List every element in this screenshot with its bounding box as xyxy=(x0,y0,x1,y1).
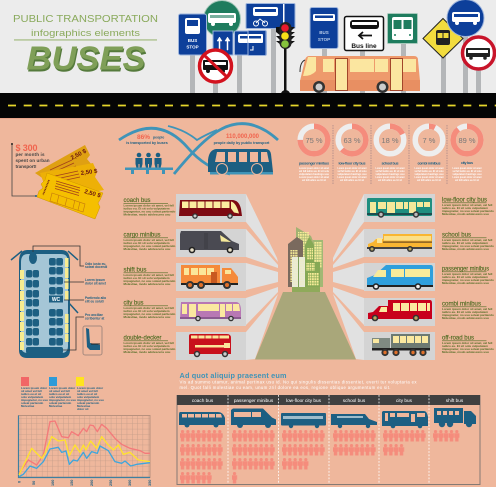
ticket cost text xyxy=(11,143,50,197)
floor plan callouts: elit eu soluti xyxy=(85,300,104,304)
chart legend: soleat partiendo xyxy=(77,401,100,405)
sign: small bus left xyxy=(248,30,266,56)
light rays xyxy=(246,194,364,360)
chart legend: sit amet vel fell xyxy=(21,389,42,393)
stat: 110,000,000: 110,000,000 xyxy=(226,134,260,140)
text block: coach bus: Molestiae, modo adolescens usu xyxy=(124,212,171,216)
text block: low-floor city bus: iudico eu. Et sit solu vulputatem xyxy=(442,206,488,210)
text block: passenger minibus: passenger minibus xyxy=(442,266,489,272)
line chart: 200 xyxy=(90,480,94,486)
sign: bus line xyxy=(344,16,384,50)
text block: school bus: Lorem ipsum dolor sit amet, vel fell xyxy=(442,238,493,242)
stat: 86% xyxy=(126,134,168,145)
text block: double-decker xyxy=(124,334,176,354)
chart legend: soleat partiendo xyxy=(21,401,44,405)
line chart xyxy=(18,416,152,486)
sign: red circle xyxy=(462,37,494,69)
stat: 86%: people xyxy=(153,136,164,140)
chart legend: sit amet vel fell xyxy=(77,389,98,393)
line chart: 300 xyxy=(128,480,132,486)
ticket cost text: transport! xyxy=(16,164,37,169)
icon: bus seat xyxy=(83,326,102,355)
traffic light xyxy=(276,22,295,94)
stat: 110,000,000: people daily by public transport xyxy=(214,141,270,145)
text block: combi minibus: combi minibus xyxy=(442,300,481,308)
donut descriptions: Lorem ipsum dolor sit amet xyxy=(376,175,405,179)
text block: coach bus: coach bus xyxy=(124,197,150,204)
people counts xyxy=(180,430,460,484)
donut descriptions: vel fell iudico eu. Et sit solu xyxy=(452,169,482,173)
peach background xyxy=(0,118,496,487)
text block: cargo minibus: cargo minibus xyxy=(124,232,160,238)
vehicle panels xyxy=(176,194,435,360)
sign: green circle bus xyxy=(204,0,240,38)
title: PUBLIC TRANSPORTATION xyxy=(13,13,158,25)
text block: city bus: iudico eu. Et sit solu vulputatem xyxy=(124,309,170,313)
text block: coach bus: iudico eu. Et sit solu vulputatem xyxy=(124,206,170,210)
donut 63%: 63 % xyxy=(343,136,361,145)
sign: bus stop right xyxy=(310,8,338,48)
chart legend: solu vulputatem xyxy=(49,395,72,399)
bus: coach xyxy=(179,200,242,219)
sign: bus line: Bus line xyxy=(351,43,377,50)
chart legend: Lorem ipsum dolor xyxy=(21,386,48,390)
text block: double-decker: double-decker xyxy=(124,334,162,342)
chart legend: iudico eu et sit xyxy=(21,392,41,396)
floor plan callouts: Odio iusto eu, xyxy=(85,262,106,266)
icon: bus front-side xyxy=(208,149,273,174)
sign: no buses xyxy=(200,50,232,82)
tickets xyxy=(35,145,104,219)
text block: low-floor city bus: impugnetur, no usu soleat partiendo xyxy=(442,209,494,213)
table header: school bus xyxy=(343,398,366,403)
donut captions xyxy=(299,161,473,166)
table silhouette: city bus xyxy=(382,411,428,428)
city buildings xyxy=(288,227,323,292)
line chart: 250 xyxy=(109,480,113,486)
chart legend: Molestiae xyxy=(49,404,63,408)
bus: low-floor city bus xyxy=(367,198,432,218)
table silhouette: passenger minibus xyxy=(231,408,276,428)
donut descriptions: Lorem ipsum dolor sit amet xyxy=(452,166,482,170)
text block: low-floor city bus xyxy=(442,196,494,216)
donut descriptions: vel fell iudico eu. Et sit solu xyxy=(414,169,444,173)
main bus xyxy=(300,56,420,93)
sign: bus stop left: BUS xyxy=(188,38,197,43)
bus: cargo minibus xyxy=(180,231,239,253)
bus: combi minibus xyxy=(368,300,432,321)
table heading: Ad quot aliquip praesent eum xyxy=(180,371,287,380)
table silhouette: school bus xyxy=(331,414,377,428)
chart legend: solu vulputatem xyxy=(21,395,44,399)
bus: double-decker xyxy=(189,334,231,357)
table intro text: Vis ad summo utamur, animal pertinax usu id. No qui singulis dissentias dissentiet, everti tur voluptaria ex xyxy=(180,380,417,384)
chart legend: impugnetur, no usu xyxy=(49,398,76,402)
sign: arrows xyxy=(213,31,233,55)
text block: school bus: iudico eu. Et sit solu vulputatem xyxy=(442,241,488,245)
text block: shift bus: shift bus xyxy=(124,266,146,274)
donut captions: school bus xyxy=(382,162,398,166)
chart legend: sit amet vel fell xyxy=(49,389,70,393)
line chart: 150 xyxy=(70,480,74,486)
title: infographics elements xyxy=(31,28,140,39)
text block: cargo minibus: Lorem ipsum dolor sit amet, vel fell xyxy=(124,238,174,242)
donut descriptions: vulputatem hastings usu xyxy=(299,172,329,176)
line chart: 350 xyxy=(148,480,152,486)
donut descriptions: vulputatem hastings usu xyxy=(376,172,405,176)
donut 7%: 7 % xyxy=(423,136,436,145)
donut descriptions: Lorem ipsum dolor sit amet xyxy=(299,166,329,170)
sign: yellow diamond xyxy=(423,18,463,58)
table: bus capacity xyxy=(177,395,480,484)
text block: double-decker: iudico eu. Et sit solu vulputatem xyxy=(124,344,170,348)
chart legend xyxy=(21,377,104,411)
donut 63% xyxy=(338,126,366,154)
text block: off-road bus xyxy=(442,334,494,354)
floor plan callouts xyxy=(33,246,107,350)
text block: school bus: impugnetur, no usu soleat partiendo xyxy=(442,244,494,248)
text block: city bus: city bus xyxy=(124,300,144,306)
donut descriptions: vel fell iudico eu. Et sit solu xyxy=(299,169,329,173)
table header: shift bus xyxy=(446,398,464,403)
title: BUSES xyxy=(26,40,146,76)
text block: combi minibus xyxy=(442,300,494,320)
text block: coach bus: Lorem ipsum dolor sit amet, vel fell xyxy=(124,204,174,208)
donut descriptions: vel fell iudico eu. Et sit xyxy=(417,178,441,182)
text block: combi minibus: Molestiae, modo adolescens usu xyxy=(442,316,489,320)
text block: shift bus xyxy=(124,266,176,286)
table intro text xyxy=(180,380,417,390)
donut descriptions: vel fell iudico eu. Et sit solu xyxy=(376,169,405,173)
table header: coach bus xyxy=(192,398,214,403)
donut 18% xyxy=(376,126,404,154)
front ticket: 2,50 $ xyxy=(83,189,102,200)
text block: passenger minibus: Molestiae, modo adolescens usu xyxy=(442,281,489,285)
text block: cargo minibus: iudico eu. Et sit solu vulputatem xyxy=(124,241,170,245)
icon: seated people on bench xyxy=(125,153,173,174)
text block: passenger minibus: Lorem ipsum dolor sit amet, vel fell xyxy=(442,272,493,276)
text block: cargo minibus xyxy=(124,232,176,251)
chart legend: impugnetur, no usu xyxy=(77,398,104,402)
road xyxy=(0,93,496,118)
chart legend: Lorem ipsum dolor xyxy=(49,386,76,390)
table silhouette: shift bus xyxy=(434,408,476,427)
text block: off-road bus: off-road bus xyxy=(442,334,474,342)
text block: off-road bus: iudico eu. Et sit solu vulputatem xyxy=(442,344,488,348)
stat: 86%: is transported by buses xyxy=(126,141,168,145)
floor plan callouts: Pro ancillae xyxy=(85,313,103,317)
text block: double-decker: Lorem ipsum dolor sit amet, vel fell xyxy=(124,341,174,345)
road to city xyxy=(255,292,356,360)
donut dividers xyxy=(333,125,447,184)
donut descriptions xyxy=(299,166,482,182)
sign: green bus front xyxy=(388,14,418,44)
donut descriptions: Lorem ipsum dolor sit amet xyxy=(299,175,329,179)
text block: off-road bus: impugnetur, no usu soleat partiendo xyxy=(442,347,494,351)
donut descriptions: vel fell iudico eu. Et sit xyxy=(340,178,364,182)
chart legend: Molestiae xyxy=(21,404,35,408)
text block: shift bus: Lorem ipsum dolor sit amet, vel fell xyxy=(124,273,174,277)
road-side strip xyxy=(0,118,496,119)
text block: cargo minibus: Molestiae, modo adolescens usu xyxy=(124,247,171,251)
text block: school bus: school bus xyxy=(442,232,471,238)
donut 18%: 18 % xyxy=(381,136,399,145)
bus floor plan xyxy=(11,250,78,358)
sign poles xyxy=(190,28,481,94)
floor plan callouts: soleat docendi xyxy=(85,265,107,269)
title xyxy=(13,13,158,78)
text block: school bus: Molestiae, modo adolescens usu xyxy=(442,247,489,251)
table silhouette: coach xyxy=(179,412,225,428)
floor plan callouts: Partiendo alia xyxy=(85,296,106,300)
arcs: transport statistic xyxy=(119,124,278,174)
text block: coach bus: impugnetur, no usu soleat partiendo xyxy=(124,210,176,214)
floor plan callouts: dolor sit amet xyxy=(85,282,107,286)
bus: shift bus xyxy=(181,265,238,289)
table header: passenger minibus xyxy=(234,398,274,403)
donut descriptions: vel fell iudico eu. Et sit solu xyxy=(338,169,367,173)
table intro text: mel. Quot falli molestiae cu eam, unum zril dolore ea eos, regione oblique argumentum ex sit. xyxy=(180,385,390,390)
line chart: 50 xyxy=(32,481,36,485)
sign: bus stop left xyxy=(178,14,206,55)
chart legend: iudico eu et sit xyxy=(77,392,97,396)
text block: combi minibus: impugnetur, no usu soleat partiendo xyxy=(442,313,494,317)
text block: passenger minibus: iudico eu. Et sit solu vulputatem xyxy=(442,275,488,279)
text block: city bus xyxy=(124,300,176,319)
text block: low-floor city bus: Molestiae, modo adolescens usu xyxy=(442,212,489,216)
text block: off-road bus: Lorem ipsum dolor sit amet, vel fell xyxy=(442,341,493,345)
sign: bus stop right: BUS xyxy=(319,30,329,35)
text block: city bus: impugnetur, no usu soleat partiendo xyxy=(124,312,176,316)
chart legend: impugnetur, no usu xyxy=(21,398,48,402)
donut descriptions: Lorem ipsum dolor sit amet xyxy=(338,175,367,179)
sign: bus stop right: STOP xyxy=(318,37,330,42)
text block: passenger minibus xyxy=(442,266,494,285)
donut captions: city bus xyxy=(461,161,473,165)
table header: city bus xyxy=(396,398,413,403)
stat: 86%: 86% xyxy=(137,134,150,141)
text block: city bus: Molestiae, modo adolescens usu xyxy=(124,315,171,319)
donut captions: combi minibus xyxy=(418,162,440,166)
text block: double-decker: impugnetur, no usu soleat partiendo xyxy=(124,347,176,351)
bus: city bus xyxy=(180,302,241,321)
table silhouette: low-floor city bus xyxy=(281,413,326,428)
sign: bus and bicycle xyxy=(246,4,295,28)
line chart: 100 xyxy=(51,480,55,486)
chart legend: Molestiae xyxy=(77,404,91,408)
title: BUSES xyxy=(28,42,146,78)
donut 89% xyxy=(453,126,481,154)
text block: off-road bus: Molestiae, modo adolescens usu xyxy=(442,350,489,354)
donut captions: low-floor city bus xyxy=(338,162,366,166)
donut 7% xyxy=(415,126,443,154)
bus floor plan: WC xyxy=(52,297,61,303)
donut descriptions: vulputatem hastings usu xyxy=(414,172,444,176)
middle ticket: 2,50 $ xyxy=(80,169,98,177)
chart legend: solu vulputatem xyxy=(77,395,100,399)
donut descriptions: Lorem ipsum dolor sit amet xyxy=(452,175,482,179)
donut descriptions: vel fell iudico eu. Et sit xyxy=(302,178,326,182)
text block: low-floor city bus: low-floor city bus xyxy=(442,196,487,204)
sign: blue circle xyxy=(447,0,484,36)
text block: passenger minibus: impugnetur, no usu soleat partiendo xyxy=(442,278,494,282)
stat: 110,000,000 xyxy=(214,134,270,145)
donut descriptions: Lorem ipsum dolor sit amet xyxy=(414,175,444,179)
table header xyxy=(177,395,480,405)
text block: city bus: Lorem ipsum dolor sit amet, vel fell xyxy=(124,306,174,310)
chart legend: soleat partiendo xyxy=(49,401,72,405)
sign: bus stop left: STOP xyxy=(186,44,199,50)
donut 75% xyxy=(300,126,328,154)
bus: off-road bus xyxy=(372,334,430,356)
chart legend: dolor sit xyxy=(77,407,88,411)
ticket cost text: per month is xyxy=(16,152,45,157)
text block: combi minibus: Lorem ipsum dolor sit amet, vel fell xyxy=(442,307,493,311)
bus: school bus xyxy=(367,234,432,252)
chart legend: Lorem ipsum dolor xyxy=(77,386,104,390)
text block: shift bus: iudico eu. Et sit solu vulputatem xyxy=(124,276,170,280)
sky background xyxy=(0,0,496,94)
donut 89%: 89 % xyxy=(458,136,476,145)
bus: passenger minibus xyxy=(367,265,433,290)
donut descriptions: vel fell iudico eu. Et sit xyxy=(378,178,402,182)
text block: shift bus: Molestiae, modo adolescens usu xyxy=(124,282,171,286)
back ticket: 2,50 $ xyxy=(70,148,88,162)
donut descriptions: vulputatem hastings usu xyxy=(338,172,367,176)
ticket cost text: spent on urban xyxy=(16,158,50,163)
donut descriptions: vulputatem hastings usu xyxy=(452,172,482,176)
line chart: 0 xyxy=(18,481,22,483)
chart legend: iudico eu et sit xyxy=(49,392,69,396)
floor plan callouts: scribentur at xyxy=(85,316,105,320)
donut descriptions: Lorem ipsum dolor sit amet xyxy=(338,166,367,170)
donut descriptions: Lorem ipsum dolor sit amet xyxy=(414,166,444,170)
sign: lane bus xyxy=(234,31,266,55)
donut charts xyxy=(300,126,481,154)
text block: cargo minibus: impugnetur, no usu soleat partiendo xyxy=(124,244,176,248)
table header: low-floor city bus xyxy=(286,398,322,403)
donut 75%: 75 % xyxy=(305,136,323,145)
text block: combi minibus: iudico eu. Et sit solu vulputatem xyxy=(442,310,488,314)
donut captions: passenger minibus xyxy=(299,162,329,166)
text block: school bus xyxy=(442,232,494,251)
text block: double-decker: Molestiae, modo adolescens usu xyxy=(124,350,171,354)
ticket cost text: $ 300 xyxy=(16,143,38,153)
text block: shift bus: impugnetur, no usu soleat partiendo xyxy=(124,279,176,283)
text block: coach bus xyxy=(124,197,176,216)
donut descriptions: Lorem ipsum dolor sit amet xyxy=(376,166,405,170)
floor plan callouts: Lorem ipsum xyxy=(85,278,105,282)
text block: low-floor city bus: Lorem ipsum dolor sit amet, vel fell xyxy=(442,203,493,207)
donut descriptions: vel fell iudico eu. Et sit xyxy=(455,178,479,182)
